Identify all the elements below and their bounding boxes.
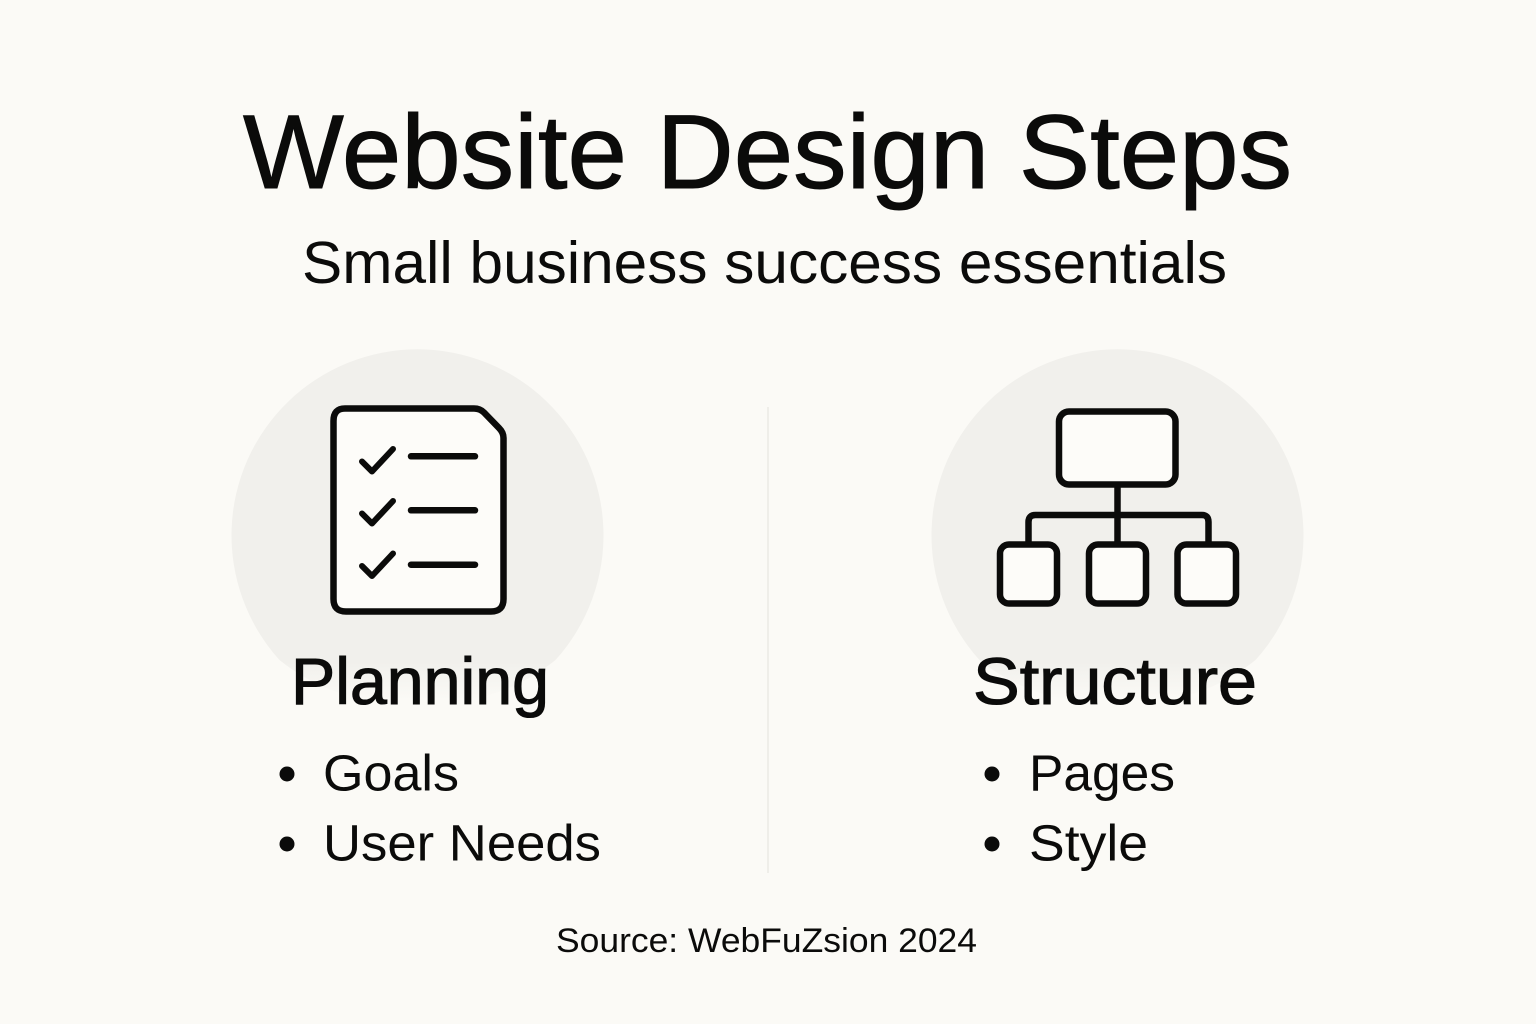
heading: structure: Structure [973, 644, 1257, 718]
icon: sitemap hierarchy [1000, 412, 1236, 604]
list: structure items [984, 744, 1175, 872]
list: planning items: User Needs [323, 814, 601, 872]
icon: checklist document [334, 408, 504, 612]
heading: planning: Planning [291, 644, 549, 718]
source note: Source: WebFuZsion 2024 [556, 922, 977, 960]
panel: planning [232, 349, 604, 871]
icon background circle: planning [232, 349, 604, 705]
divider [767, 407, 769, 873]
list: planning items: Goals [323, 744, 459, 802]
panel: structure [932, 349, 1303, 871]
list: planning items [280, 744, 601, 872]
list: structure items: Pages [1029, 744, 1175, 802]
subtitle: Small business success essentials [302, 230, 1227, 296]
list: structure items: Style [1029, 814, 1148, 872]
title: Website Design Steps [243, 94, 1292, 211]
icon background circle: structure [932, 349, 1303, 705]
